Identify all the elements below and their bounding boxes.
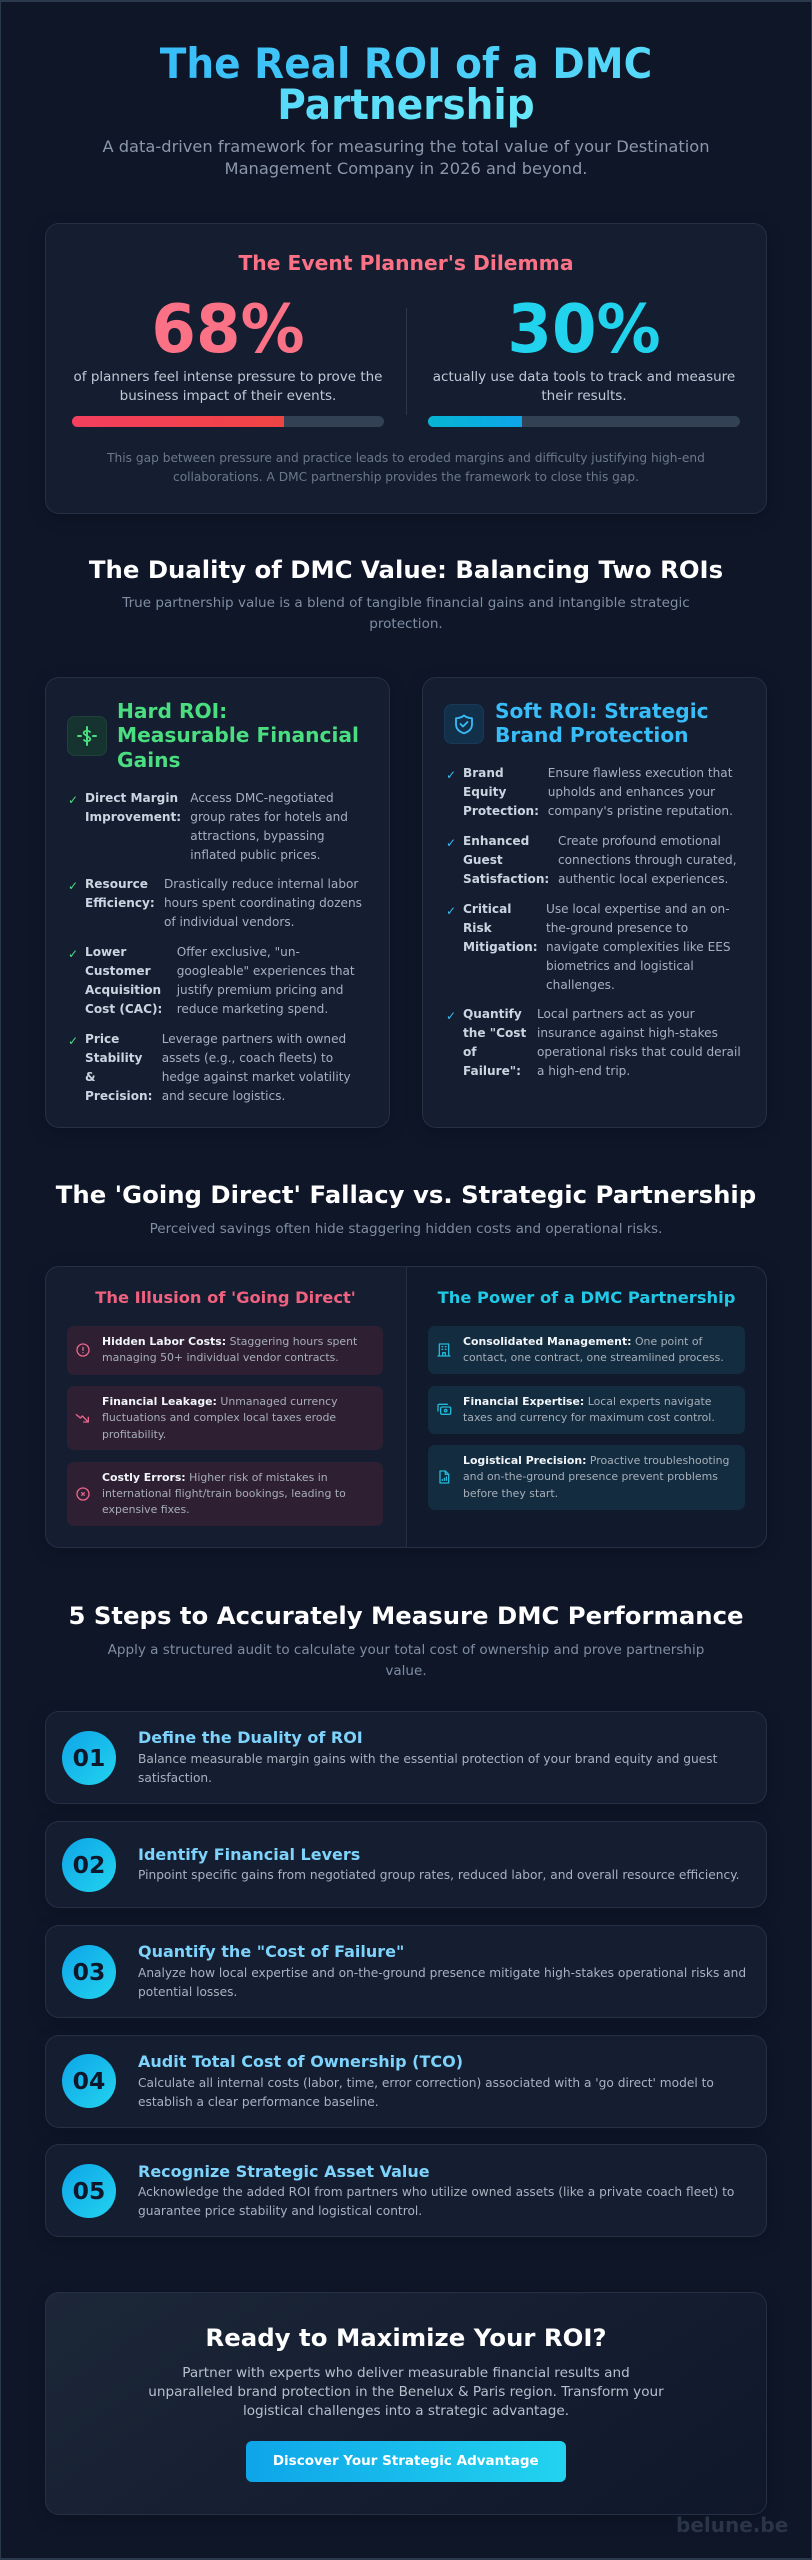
text: costly errors: international flight/train bookings, leading to (102, 1487, 346, 1500)
icon: document chart (439, 1470, 450, 1484)
number badge 03: 03 (73, 1958, 105, 1986)
number badge 04 (62, 2054, 116, 2108)
text: logistical precision: Logistical Precision: Proactive troubleshooting (463, 1454, 729, 1467)
panel: hard ROI: of individual vendors. (164, 914, 294, 928)
panel: soft ROI: Local partners act as your (537, 1006, 695, 1020)
step 2 title: Identify Financial Levers (138, 1845, 360, 1864)
step 5 description (138, 2184, 734, 2218)
panel: soft ROI: upholds and enhances your (548, 784, 715, 798)
CTA text (148, 2364, 664, 2418)
text: financial expertise (463, 1395, 715, 1424)
step 4 description: establish a clear performance baseline. (138, 2094, 379, 2108)
text: consolidated management: Consolidated Management: One point of (463, 1335, 702, 1348)
text: hidden labor costs (102, 1335, 357, 1364)
section subheading: duality: True partnership value is a blend of tangible financial gains and intangible strategic (122, 594, 690, 610)
panel: hard ROI: Stability (85, 1050, 142, 1064)
panel: soft ROI: Mitigation: (463, 940, 538, 954)
section subheading: duality (122, 594, 690, 632)
panel: soft ROI: operational risks that could derail (537, 1044, 741, 1058)
stat description: pressure: business impact of their events. (120, 388, 336, 404)
heading: soft ROI: Brand Protection (495, 723, 689, 747)
panel: soft ROI: Satisfaction: (463, 872, 549, 886)
panel: soft ROI: ✓ (446, 904, 456, 918)
panel: hard ROI: Improvement: (85, 810, 181, 824)
panel: hard ROI: Lower (85, 944, 126, 958)
panel: soft ROI: Equity (463, 784, 506, 798)
panel: comparison (45, 1266, 767, 1548)
panel: hard ROI: hedge against market volatility (162, 1070, 351, 1084)
heading: soft ROI: Soft ROI: Strategic (495, 699, 709, 723)
text: consolidated management: contact, one contract, one streamlined process. (463, 1351, 724, 1364)
heading: soft ROI (495, 699, 709, 747)
panel: soft ROI: ✓ (446, 768, 456, 782)
panel: soft ROI: authentic local experiences. (558, 872, 728, 886)
icon: building (437, 1343, 451, 1357)
panel: soft ROI: biometrics and logistical (546, 958, 694, 972)
subtitle: A data-driven framework for measuring the total value of your Destination (102, 137, 710, 156)
list item: direct margin (68, 790, 348, 862)
number badge 01: 01 (73, 1744, 105, 1772)
panel: soft ROI: company's pristine reputation. (548, 804, 733, 818)
step 3 (45, 1925, 767, 2018)
heading: power of a DMC partnership: The Power of a DMC Partnership (438, 1288, 735, 1307)
panel: soft ROI: Create profound emotional (558, 834, 721, 848)
panel: soft ROI: Ensure flawless execution that (548, 766, 732, 780)
panel: hard ROI: Access DMC-negotiated (190, 790, 334, 804)
step 3 title: Quantify the "Cost of Failure" (138, 1942, 404, 1961)
stat: 30%: 30% (507, 291, 661, 369)
panel: soft ROI: challenges. (546, 978, 615, 992)
CTA button: Discover Your Strategic Advantage (273, 2453, 539, 2469)
panel: hard ROI: Price (85, 1032, 119, 1046)
number badge 02 (62, 1838, 116, 1892)
text: financial leakage: fluctuations and complex local taxes erode (102, 1411, 336, 1424)
note: collaborations. A DMC partnership provides the framework to close this gap. (173, 470, 639, 484)
panel: hard ROI: Drastically reduce internal labor (164, 876, 358, 890)
title: Partnership (277, 81, 535, 129)
step 1 description: satisfaction. (138, 1770, 212, 1784)
item: financial leakage (67, 1386, 383, 1450)
stat description: data tools (433, 368, 735, 404)
panel: hard ROI: Acquisition (85, 982, 161, 996)
number badge 05: 05 (73, 2177, 105, 2205)
section subheading: going direct: Perceived savings often hide staggering hidden costs and operational risks. (150, 1220, 662, 1236)
text: logistical precision (463, 1454, 729, 1500)
number badge 03 (62, 1945, 116, 1999)
panel: hard ROI: Direct Margin (85, 790, 178, 804)
panel: soft ROI: ✓ (446, 1008, 456, 1022)
icon: banknotes (437, 1404, 452, 1415)
CTA button (246, 2441, 566, 2482)
panel: soft ROI: Failure": (463, 1064, 521, 1078)
step 2 description: Pinpoint specific gains from negotiated group rates, reduced labor, and overall resource efficiency. (138, 1868, 740, 1882)
panel: hard ROI: group rates for hotels and (190, 810, 348, 824)
CTA text: unparalleled brand protection in the Benelux & Paris region. Transform your (148, 2384, 664, 2400)
text: financial leakage (102, 1395, 338, 1441)
step 4 description: Calculate all internal costs (labor, time, error correction) associated with a 'go direct' model to (138, 2076, 714, 2090)
panel: soft ROI: ✓ (446, 836, 456, 850)
progress bar: 30% (428, 416, 740, 427)
panel: hard ROI: justify premium pricing and (177, 982, 343, 996)
step 1 description: Balance measurable margin gains with the essential protection of your brand equity and guest (138, 1752, 717, 1766)
stat description: pressure (74, 368, 382, 404)
panel: soft ROI: navigate complexities like EES (546, 940, 731, 954)
list item: cost of failure (446, 1006, 741, 1078)
panel: soft ROI: Enhanced (463, 834, 529, 848)
panel: hard ROI: reduce marketing spend. (177, 1002, 328, 1016)
step 1 title: Define the Duality of ROI (138, 1728, 363, 1747)
panel: hard ROI: ✓ (68, 1034, 78, 1048)
list item: brand equity (446, 766, 733, 818)
step 4 description (138, 2076, 714, 2108)
number badge 04: 04 (73, 2067, 105, 2095)
panel: soft ROI: Brand (463, 766, 504, 780)
note (107, 450, 705, 484)
number badge 05 (62, 2164, 116, 2218)
panel: soft ROI: Risk (463, 920, 492, 934)
icon: x circle (76, 1487, 90, 1501)
panel: hard ROI: attractions, bypassing (190, 828, 325, 842)
stat: 68%: 68% (151, 291, 305, 369)
panel: hard ROI: Precision: (85, 1088, 152, 1102)
heading: hard ROI: Measurable Financial (117, 723, 359, 747)
panel: hard ROI: inflated public prices. (190, 848, 321, 862)
list item: price stability (68, 1032, 351, 1102)
text: financial leakage: Financial Leakage: Unmanaged currency (102, 1395, 338, 1408)
panel: hard ROI: Offer exclusive, "un- (177, 944, 300, 958)
panel: soft ROI: a high-end trip. (537, 1064, 630, 1078)
step 4 (45, 2035, 767, 2128)
step 3 description (138, 1966, 746, 1998)
panel: the event planner's dilemma (45, 223, 767, 514)
stat description: data tools: actually use data tools to track and measure (433, 368, 735, 384)
step 4 title: Audit Total Cost of Ownership (TCO) (138, 2052, 463, 2071)
item: consolidated management (428, 1326, 745, 1374)
CTA heading: Ready to Maximize Your ROI? (205, 2323, 607, 2352)
note: This gap between pressure and practice leads to eroded margins and difficulty justifying high-end (107, 450, 705, 464)
panel: hard ROI: assets (e.g., coach fleets) to (162, 1050, 333, 1064)
section subheading: duality: protection. (369, 616, 443, 632)
text: costly errors: expensive fixes. (102, 1503, 190, 1516)
panel: hard ROI: ✓ (68, 946, 78, 960)
step 1 description (138, 1752, 718, 1784)
step 2 (45, 1821, 767, 1908)
text: logistical precision: before they start. (463, 1487, 558, 1500)
panel: hard ROI: googleable" experiences that (177, 964, 355, 978)
step 5 (45, 2144, 767, 2237)
text: costly errors: Costly Errors: Higher risk of mistakes in (102, 1470, 328, 1484)
panel: hard ROI (45, 677, 390, 1128)
step 5 description: Acknowledge the added ROI from partners who utilize owned assets (like a private coach fleet) to (138, 2184, 734, 2198)
CTA text: logistical challenges into a strategic advantage. (243, 2402, 569, 2418)
section heading: five steps: 5 Steps to Accurately Measure DMC Performance (68, 1601, 744, 1630)
subtitle (102, 137, 710, 178)
panel: hard ROI: Leverage partners with owned (162, 1032, 346, 1046)
panel: soft ROI: Critical (463, 902, 511, 916)
item: hidden labor costs (67, 1326, 383, 1375)
panel: hard ROI: Efficiency: (85, 896, 155, 910)
CTA text: Partner with experts who deliver measurable financial results and (182, 2364, 630, 2380)
heading: hard ROI (117, 699, 359, 772)
panel: hard ROI: & (85, 1070, 96, 1084)
stat description: data tools: their results. (541, 388, 627, 404)
section subheading: five steps (108, 1642, 704, 1678)
list item: guest satisfaction (446, 834, 737, 886)
text: costly errors (102, 1470, 346, 1516)
section heading: duality: The Duality of DMC Value: Balancing Two ROIs (89, 555, 723, 584)
step 1 (45, 1711, 767, 1804)
list item: resource efficiency (68, 876, 362, 928)
panel: hard ROI: Resource (85, 876, 148, 890)
list item: lower CAC (68, 944, 355, 1016)
panel: soft ROI: Guest (463, 852, 503, 866)
panel: hard ROI: Customer (85, 964, 151, 978)
panel: hard ROI: hours spent coordinating dozens (164, 896, 362, 910)
stat description: pressure: of planners feel intense pressure to prove the (74, 368, 382, 384)
icon: dollar pulse (67, 716, 107, 756)
number badge 01 (62, 1731, 116, 1785)
icon: shield check (444, 704, 484, 744)
panel: soft ROI (422, 677, 767, 1128)
panel: soft ROI: the "Cost (463, 1026, 526, 1040)
item: costly errors (67, 1462, 383, 1526)
panel: hard ROI: Cost (CAC): (85, 1002, 162, 1016)
heading: hard ROI: Hard ROI: (117, 699, 227, 723)
item: financial expertise (428, 1386, 745, 1434)
list item: risk mitigation (446, 902, 731, 992)
step 5 title: Recognize Strategic Asset Value (138, 2162, 430, 2181)
text: hidden labor costs: managing 50+ individual vendor contracts. (102, 1351, 339, 1364)
panel: soft ROI: Quantify (463, 1006, 522, 1020)
title: The Real ROI of a DMC (160, 40, 652, 88)
step 3 description: potential losses. (138, 1984, 237, 1998)
section subheading: five steps: Apply a structured audit to calculate your total cost of ownership and prove partnership (108, 1642, 704, 1658)
icon: alert circle (76, 1343, 90, 1357)
panel: soft ROI: of (463, 1044, 477, 1058)
watermark: belune.be (676, 2513, 788, 2537)
icon: trending down (76, 1414, 89, 1423)
panel: soft ROI: insurance against high-stakes (537, 1026, 718, 1040)
item: logistical precision (428, 1445, 745, 1510)
text: financial leakage: profitability. (102, 1428, 166, 1441)
heading: illusion of going direct: The Illusion of 'Going Direct' (95, 1288, 356, 1307)
text: hidden labor costs: Hidden Labor Costs: Staggering hours spent (102, 1335, 357, 1348)
title (160, 40, 652, 129)
subtitle: Management Company in 2026 and beyond. (225, 159, 587, 178)
text: financial expertise: Financial Expertise: Local experts navigate (463, 1395, 712, 1408)
section subheading: five steps: value. (385, 1662, 427, 1678)
panel: soft ROI: Use local expertise and an on- (546, 902, 730, 916)
panel: call to action (45, 2292, 767, 2515)
heading: dilemma: The Event Planner's Dilemma (238, 251, 574, 275)
panel: soft ROI: connections through curated, (558, 852, 737, 866)
number badge 02: 02 (73, 1851, 105, 1879)
panel: soft ROI: the-ground presence to (546, 920, 688, 934)
panel: hard ROI: and secure logistics. (162, 1088, 285, 1102)
heading: hard ROI: Gains (117, 748, 180, 772)
section heading: going direct: The 'Going Direct' Fallacy vs. Strategic Partnership (56, 1180, 756, 1209)
panel: hard ROI: ✓ (68, 878, 78, 892)
step 3 description: Analyze how local expertise and on-the-ground presence mitigate high-stakes operational risks and (138, 1966, 746, 1980)
progress bar: 68% (72, 416, 384, 427)
panel: hard ROI: ✓ (68, 792, 78, 806)
panel: soft ROI: Protection: (463, 804, 539, 818)
step 5 description: guarantee price stability and logistical control. (138, 2204, 422, 2218)
text: financial expertise: taxes and currency for maximum cost control. (463, 1411, 715, 1424)
text: logistical precision: and on-the-ground presence prevent problems (463, 1470, 718, 1483)
text: consolidated management (463, 1335, 724, 1364)
